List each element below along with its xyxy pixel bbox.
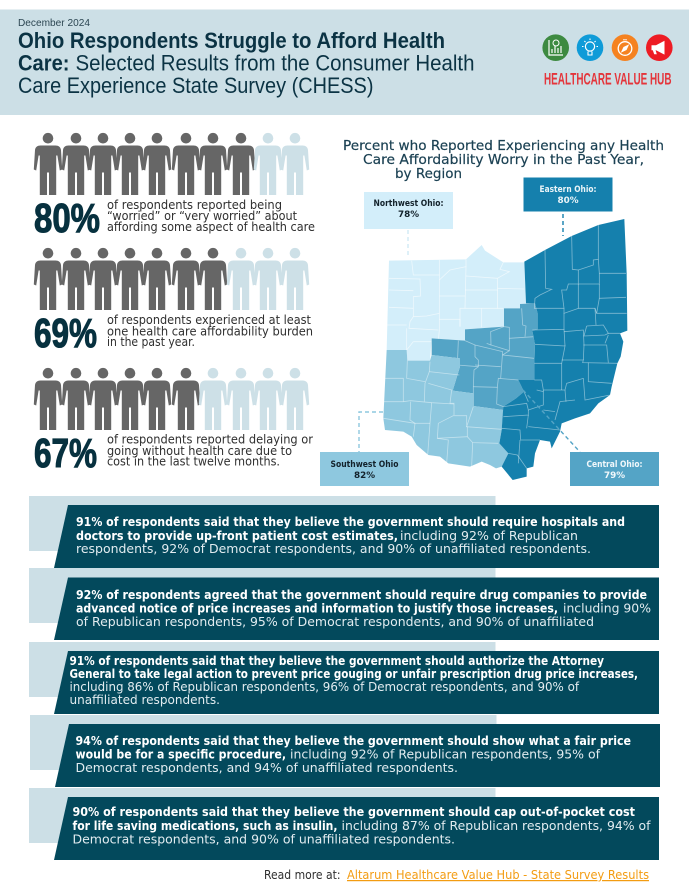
stat: 69% burden bbox=[34, 248, 313, 356]
pictogram: 6 of 10 people bbox=[34, 368, 309, 430]
description: of respondents reported delaying or bbox=[107, 432, 314, 446]
description bbox=[107, 198, 315, 234]
number: 80% bbox=[34, 195, 100, 241]
title bbox=[18, 28, 474, 98]
description: “worried” or “very worried” about bbox=[107, 209, 297, 223]
panel: drug price notice: including 90% bbox=[563, 600, 651, 616]
panel: attorney general action: 91% of respondents said that they believe the government should authorize the Attorney bbox=[70, 653, 604, 668]
callout: southwest ohio: Southwest Ohio bbox=[330, 460, 398, 470]
map title: Care Affordability Worry in the Past Year, bbox=[363, 152, 644, 168]
region: northwest bbox=[387, 245, 526, 361]
callout: eastern ohio: Eastern Ohio: bbox=[540, 185, 596, 195]
callout: southwest ohio: 82% bbox=[354, 471, 375, 481]
description: one health care affordability burden bbox=[107, 324, 313, 338]
region: central bbox=[432, 303, 538, 410]
map title: by Region bbox=[395, 166, 462, 182]
panel: insulin cost cap: for life saving medications, such as insulin, bbox=[72, 818, 338, 833]
panel: attorney general action: unaffiliated respondents. bbox=[70, 692, 220, 707]
callout: northwest ohio: 78% bbox=[398, 210, 419, 220]
panel: fair price: including 92% of Republican respondents, 95% of bbox=[290, 746, 601, 762]
description bbox=[107, 432, 314, 468]
pictogram: 7 of 10 people bbox=[34, 248, 309, 310]
map title: Percent who Reported Experiencing any Health bbox=[343, 138, 664, 154]
title: Selected Results from the Consumer Health bbox=[76, 50, 474, 76]
panel: drug price notice: advanced notice of price increases and information to justify those increases, bbox=[76, 600, 558, 616]
panel: cost estimates: 91% of respondents said that they believe the government should require hospitals and bbox=[76, 514, 625, 529]
logo: healthcare value hub bbox=[542, 34, 673, 88]
callout: eastern ohio bbox=[524, 178, 612, 236]
callout: central ohio bbox=[523, 390, 659, 486]
panel: cost estimates bbox=[29, 496, 659, 568]
icon: light bulb bbox=[577, 34, 603, 61]
title: Care Experience State Survey (CHESS) bbox=[18, 73, 374, 98]
stat: 67% delaying care bbox=[34, 368, 314, 476]
pictogram: 8 of 10 people bbox=[34, 133, 309, 195]
callout: central ohio: Central Ohio: bbox=[586, 460, 642, 470]
panel: insulin cost cap: including 87% of Republican respondents, 94% of bbox=[342, 818, 651, 833]
callout: northwest ohio bbox=[364, 192, 453, 258]
panel: cost estimates: respondents, 92% of Democrat respondents, and 90% of unaffiliated respondents. bbox=[76, 541, 591, 556]
panel: insulin cost cap: 90% of respondents said that they believe the government should cap out-of-pocket cost bbox=[72, 804, 635, 819]
number: 67% bbox=[34, 430, 97, 476]
panel: attorney general action: including 86% of Republican respondents, 96% of Democrat respondents, and 90% of bbox=[70, 679, 580, 694]
panel: attorney general action bbox=[29, 642, 659, 714]
panel: drug price notice: of Republican respondents, 95% of Democrat respondents, and 90% of unaffiliated bbox=[76, 614, 594, 629]
region: southwest bbox=[383, 350, 508, 468]
icon: megaphone bbox=[646, 34, 673, 61]
description: of respondents reported being bbox=[107, 198, 282, 212]
panel: fair price: would be for a specific procedure, bbox=[76, 746, 286, 762]
icon: finance chart bbox=[542, 34, 569, 61]
callout: northwest ohio: Northwest Ohio: bbox=[374, 199, 444, 209]
description: in the past year. bbox=[107, 335, 195, 349]
footer: read more link: Altarum Healthcare Value Hub - State Survey Results bbox=[347, 868, 649, 882]
description: cost in the last twelve months. bbox=[107, 454, 280, 468]
title: Care: bbox=[18, 50, 70, 76]
description bbox=[107, 313, 313, 349]
panel: cost estimates: including 92% of Republican bbox=[400, 528, 578, 543]
stat: 80% worried bbox=[34, 133, 315, 241]
callout: central ohio: 79% bbox=[604, 471, 625, 481]
footer: read more link: Read more at: bbox=[264, 868, 340, 882]
description: going without health care due to bbox=[107, 444, 292, 458]
panel: insulin cost cap bbox=[29, 788, 659, 860]
panel: fair price: 94% of respondents said that they believe the government should show what a fair price bbox=[76, 733, 631, 748]
date: December 2024 bbox=[18, 18, 90, 29]
header band bbox=[0, 10, 689, 115]
panel: fair price: Democrat respondents, and 94% of unaffiliated respondents. bbox=[76, 760, 458, 775]
panel: fair price bbox=[30, 715, 660, 787]
panel: drug price notice bbox=[29, 568, 659, 640]
callout: eastern ohio: 80% bbox=[557, 196, 579, 206]
number: 69% bbox=[34, 310, 97, 356]
region: eastern bbox=[499, 219, 627, 480]
panel: insulin cost cap: Democrat respondents, and 90% of unaffiliated respondents. bbox=[72, 832, 455, 846]
map title bbox=[343, 138, 664, 182]
map of Ohio by region bbox=[320, 178, 659, 486]
description: affording some aspect of health care bbox=[107, 220, 315, 234]
description: of respondents experienced at least bbox=[107, 313, 311, 327]
callout: southwest ohio bbox=[320, 412, 409, 486]
title: Ohio Respondents Struggle to Afford Health bbox=[18, 28, 445, 53]
panel: cost estimates: doctors to provide up-front patient cost estimates, bbox=[76, 528, 398, 543]
icon: compass bbox=[612, 34, 638, 61]
